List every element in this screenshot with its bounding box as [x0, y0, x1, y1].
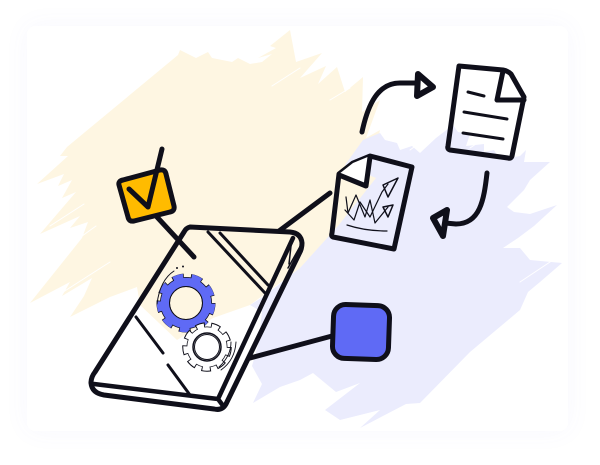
icon: chart document — [332, 156, 412, 249]
cream paint brush stroke — [30, 30, 380, 340]
arrow: to text document — [362, 74, 433, 132]
icon: yellow checkbox — [119, 149, 174, 221]
icon: white gear — [186, 326, 236, 370]
icon: text document — [448, 66, 524, 158]
icon: blue gear — [157, 266, 212, 330]
connector: phone to chart document — [279, 193, 330, 231]
panel: white card — [27, 26, 568, 431]
tablet device — [91, 227, 302, 409]
icon: blue square — [332, 304, 390, 360]
arrow: to chart document — [433, 173, 487, 236]
connector: phone to blue square — [250, 336, 332, 358]
streaks in the paint edges — [46, 68, 556, 294]
blue paint brush stroke — [250, 125, 562, 428]
connector: checkbox to phone — [157, 217, 194, 257]
